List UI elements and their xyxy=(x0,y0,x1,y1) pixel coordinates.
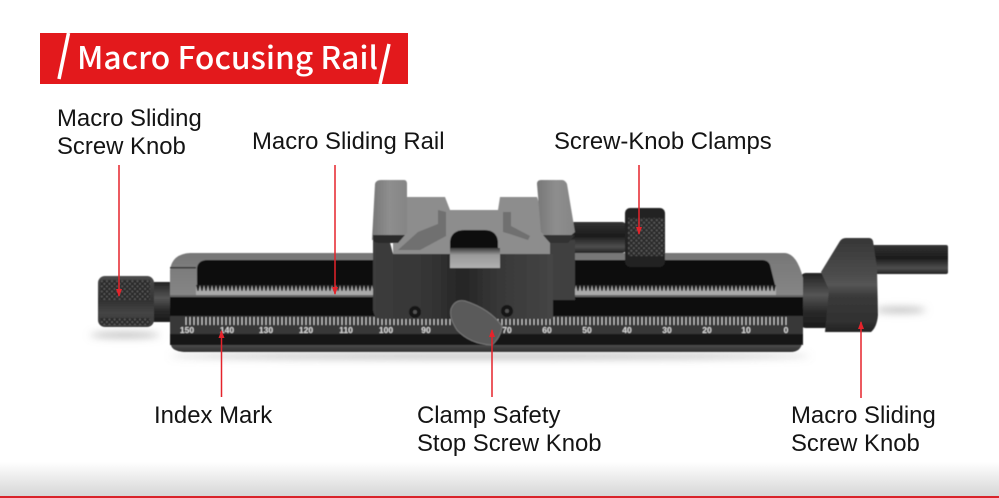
scale numbers: 30 xyxy=(662,325,672,335)
scale numbers: 20 xyxy=(702,325,712,335)
label: macro sliding screw knob right: Screw Knob xyxy=(791,430,920,457)
label: screw-knob clamps: Screw-Knob Clamps xyxy=(554,128,772,155)
scale numbers: 0 xyxy=(784,325,789,335)
label: macro sliding rail: Macro Sliding Rail xyxy=(252,128,445,155)
scale numbers: 10 xyxy=(741,325,751,335)
scale numbers: 110 xyxy=(339,325,353,335)
title banner: Macro Focusing Rail xyxy=(77,33,378,78)
scale numbers xyxy=(180,325,789,335)
label: clamp safety stop screw knob: Stop Screw Knob xyxy=(417,430,602,457)
shadows xyxy=(90,307,926,359)
leader: screw-knob clamps xyxy=(636,165,642,235)
front face xyxy=(373,235,553,319)
scale numbers: 150 xyxy=(180,325,194,335)
leader: clamp safety xyxy=(489,329,495,397)
scale numbers: 70 xyxy=(502,325,512,335)
scale numbers: 130 xyxy=(259,325,273,335)
scale ticks xyxy=(185,316,787,325)
scale numbers: 60 xyxy=(542,325,552,335)
leader: index mark xyxy=(218,330,224,397)
leader: macro sliding screw knob left xyxy=(116,165,122,297)
right jaw xyxy=(537,180,575,238)
label: macro sliding screw knob left: Macro Sliding xyxy=(57,105,202,132)
scale numbers: 120 xyxy=(299,325,313,335)
label: clamp safety stop screw knob: Clamp Safety xyxy=(417,402,560,429)
screw-knob clamp xyxy=(570,208,665,267)
label: macro sliding screw knob right: Macro Sliding xyxy=(791,402,936,429)
focusing rail photo xyxy=(90,180,948,359)
scale numbers: 100 xyxy=(379,325,393,335)
slot xyxy=(197,260,775,285)
top plate xyxy=(393,197,552,255)
floor gradient xyxy=(0,462,999,496)
centre notch xyxy=(450,230,498,250)
side block xyxy=(550,240,575,300)
label: macro sliding screw knob left: Screw Knob xyxy=(57,133,186,160)
scale numbers: 50 xyxy=(582,325,592,335)
bottom red line xyxy=(0,496,999,498)
rail body xyxy=(170,253,803,352)
dark band xyxy=(170,297,803,316)
scale numbers: 140 xyxy=(220,325,234,335)
scale numbers: 90 xyxy=(421,325,431,335)
screws xyxy=(409,305,513,318)
right knob with pin xyxy=(800,238,948,332)
scale numbers: 40 xyxy=(622,325,632,335)
carriage xyxy=(372,180,575,319)
leader: macro sliding screw knob right xyxy=(858,321,864,398)
clamp safety knob xyxy=(451,301,502,345)
left jaw xyxy=(372,180,407,240)
left knob xyxy=(98,276,171,327)
label: index mark: Index Mark xyxy=(154,402,272,429)
leader: macro sliding rail xyxy=(332,165,338,295)
scale band xyxy=(170,316,803,334)
